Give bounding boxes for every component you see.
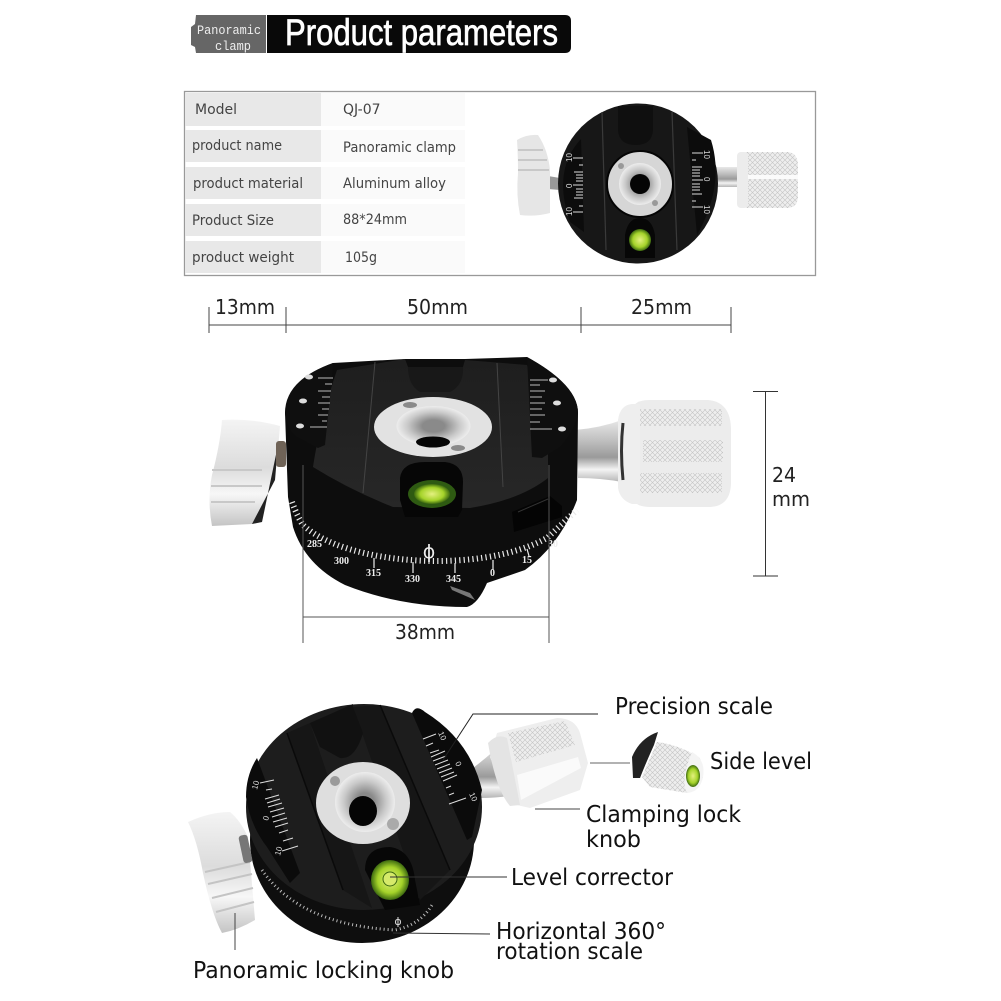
banner tab: Panoramic clamp: Panoramic (197, 23, 261, 38)
body silhouette (285, 357, 578, 607)
panel: parameters table (184, 92, 816, 276)
icon: main product front photo: 0 (490, 568, 495, 579)
callout: horizontal rotation scale: rotation scale (496, 939, 643, 965)
icon: side level knob photo (632, 732, 704, 793)
top plate (246, 704, 482, 910)
banner tab: Panoramic clamp (191, 15, 266, 54)
bubble level (365, 847, 420, 910)
locking lever (188, 812, 255, 933)
callout: clamping lock knob: knob (586, 827, 641, 853)
side slot (512, 496, 562, 532)
row: product material (185, 167, 465, 199)
icon: angled product photo: 10 (250, 779, 261, 791)
clamping knob (473, 718, 588, 808)
left scale wing (246, 758, 300, 883)
icon: main product front photo: 300 (334, 556, 349, 567)
right scale wing (412, 708, 482, 840)
icon: angled product photo (188, 704, 588, 943)
dimension: height 24 mm (753, 392, 810, 576)
row: product weight (185, 241, 465, 273)
bubble level (400, 462, 463, 517)
icon: angled product photo: 0 (261, 814, 271, 822)
dimension: width measurements: 50mm (407, 295, 468, 319)
icon: angled product photo: 0 (453, 760, 463, 768)
phi mark: ϕ (423, 541, 435, 563)
top plate (313, 359, 548, 508)
callout: clamping lock knob (535, 802, 742, 853)
icon: main product front photo: 285 (307, 539, 322, 550)
row: model: QJ-07 (343, 102, 381, 118)
dimension: width measurements (209, 295, 731, 333)
row: product weight: 105g (345, 250, 377, 266)
dimension: base width 38mm (303, 465, 549, 644)
dimension: base width 38mm: 38mm (395, 620, 455, 644)
row: product weight: product weight (192, 250, 294, 266)
left locking lever (210, 420, 286, 526)
row: product material: product material (193, 176, 303, 192)
icon: main product front photo: 315 (366, 568, 381, 579)
callout: level corrector: Level corrector (511, 865, 674, 891)
icon: angled product photo: 10 (467, 791, 479, 803)
dimension: height 24 mm: mm (772, 487, 810, 511)
rotation scale ticks (292, 502, 577, 561)
heading: Product parameters: Product parameters (285, 12, 558, 53)
icon: product top view photo: 10 (702, 150, 711, 159)
right scale wing (527, 357, 578, 458)
icon: main product front photo: 330 (405, 574, 420, 585)
callout: panoramic locking knob: Panoramic locking knob (193, 958, 454, 984)
icon: product top view photo: 10 (565, 207, 574, 216)
mounting ring and cone (316, 762, 410, 844)
icon: product top view photo: 0 (702, 177, 711, 182)
dimension: height 24 mm: 24 (772, 463, 796, 487)
icon: main product front photo: 30 (548, 539, 558, 550)
title banner (191, 12, 571, 54)
icon: product top view photo (517, 104, 798, 264)
banner tab: Panoramic clamp: clamp (215, 39, 251, 54)
callout: clamping lock knob: Clamping lock (586, 802, 742, 828)
row: product size: 88*24mm (343, 212, 407, 228)
row: model: Model (195, 102, 237, 118)
callout: side level: Side level (710, 749, 812, 775)
callout: horizontal rotation scale (393, 919, 666, 965)
row: product name (185, 130, 465, 162)
icon: angled product photo: 10 (273, 845, 284, 857)
row: product size: Product Size (192, 213, 274, 229)
dimension: width measurements: 13mm (215, 295, 275, 319)
icon: main product front photo (210, 357, 731, 607)
icon: main product front photo: 345 (446, 574, 461, 585)
callout: horizontal rotation scale: Horizontal 360° (496, 919, 666, 945)
row: product size (185, 204, 465, 236)
row: product material: Aluminum alloy (343, 176, 446, 192)
left scale wing (285, 363, 333, 448)
callout: precision scale: Precision scale (615, 694, 773, 720)
icon: product top view photo: 0 (565, 183, 574, 188)
phi mark: ϕ (394, 915, 402, 928)
dimension: width measurements: 25mm (631, 295, 692, 319)
icon: product top view photo: 10 (565, 153, 574, 162)
mounting ring and cone (374, 397, 492, 457)
rotation scale (262, 870, 432, 930)
callout: precision scale (443, 694, 773, 760)
row: model (185, 93, 465, 126)
row: product name: Panoramic clamp (343, 140, 456, 156)
icon: main product front photo: 15 (522, 555, 532, 566)
icon: angled product photo: 10 (436, 730, 448, 742)
base (250, 737, 474, 943)
icon: product top view photo: 10 (702, 205, 711, 214)
right clamping knob (575, 400, 731, 507)
row: product name: product name (192, 138, 282, 154)
